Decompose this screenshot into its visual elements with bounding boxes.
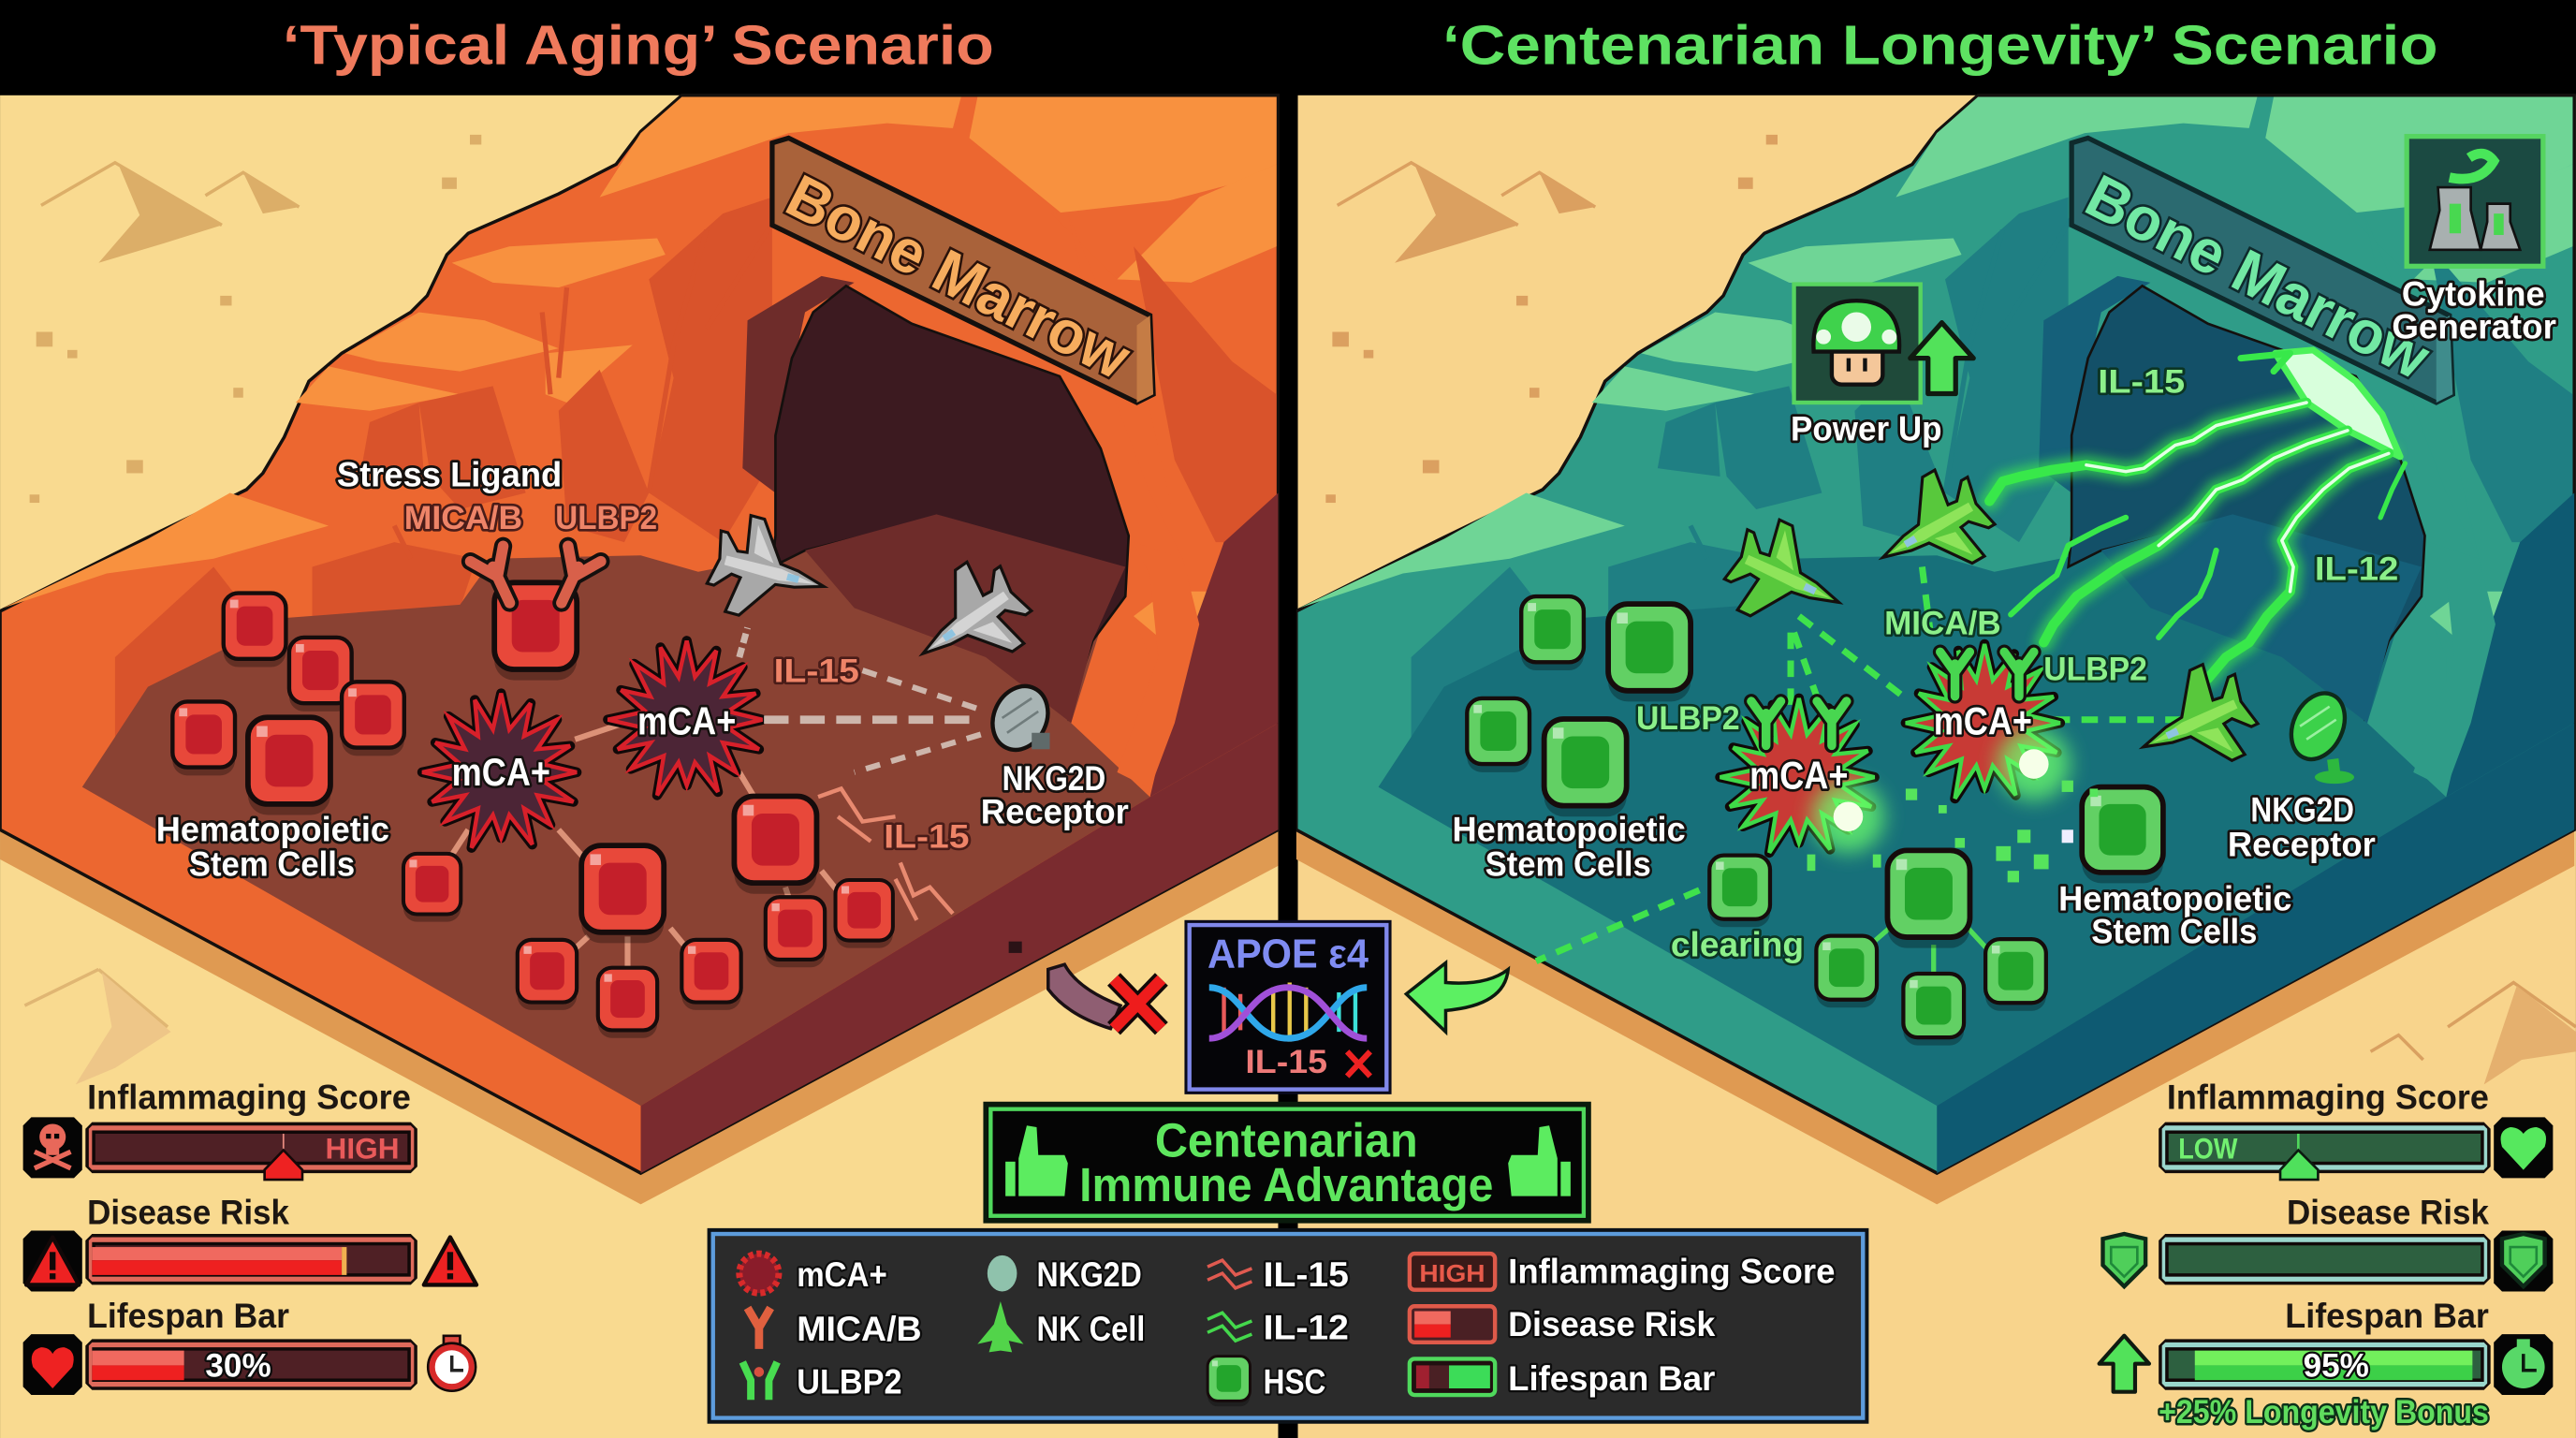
icon: up arrow: [1910, 323, 1973, 394]
NK jets left, grey: [701, 509, 1045, 695]
bone marrow terrain right: [1296, 95, 2574, 1204]
gauge: lifespan bar right: +25% Longevity Bonus: [2159, 1394, 2489, 1431]
legend item: NKG2D: NKG2D: [1036, 1255, 1142, 1294]
legend item: MICA/B: MICA/B: [797, 1310, 922, 1348]
legend item: IL-15: IL-15: [1264, 1255, 1349, 1294]
legend item: IL-15: [1208, 1255, 1349, 1294]
labels left: Stress Ligand: [337, 455, 562, 493]
gauge: lifespan bar right: 95%: [2304, 1348, 2369, 1385]
title: typical aging scenario: ‘Typical Aging’ Scenario: [283, 13, 994, 76]
icon: DNA helix: [1209, 983, 1367, 1042]
gauge: lifespan bar left: Lifespan Bar: [87, 1297, 289, 1335]
icon: stopwatch: [428, 1336, 476, 1391]
labels left: Stem Cells: [189, 844, 355, 883]
NKG2D receptor dish left: [983, 677, 1058, 759]
labels left: ULBP2: [555, 500, 657, 536]
legend panel: [710, 1231, 1866, 1421]
hematopoietic stem cells right: [1467, 596, 2163, 1046]
legend item: mCA+: mCA+: [797, 1255, 887, 1294]
icon: stopwatch green: [2502, 1339, 2545, 1388]
gauge: lifespan bar right: [2100, 1297, 2553, 1431]
labels right: Generator: [2392, 308, 2556, 346]
APOE e4 gene panel: APOE ε4: [1208, 932, 1369, 977]
icon: thumb up right: [1508, 1125, 1571, 1196]
gauge: inflammaging score left: HIGH: [326, 1131, 400, 1165]
legend item: inflammaging score: HIGH: [1419, 1259, 1486, 1287]
legend item: NK Cell: [977, 1301, 1145, 1352]
labels right: mCA+: [1749, 753, 1848, 797]
icon: heart: [32, 1347, 74, 1388]
labels right: clearing: [1671, 925, 1804, 963]
labels right: Hematopoietic: [2058, 879, 2291, 917]
legend item: NKG2D: [988, 1255, 1142, 1294]
sign: bone marrow: Bone Marrow: [776, 161, 1141, 392]
gauge: inflammaging score right: [2159, 1078, 2553, 1180]
gauge: inflammaging score right: LOW: [2178, 1131, 2238, 1165]
gauge: lifespan bar left: [23, 1297, 476, 1395]
labels left: Receptor: [981, 792, 1129, 830]
legend item: ULBP2: ULBP2: [797, 1362, 902, 1401]
labels left: Hematopoietic: [156, 811, 389, 849]
labels right: ULBP2: [1636, 700, 1740, 737]
legend item: ULBP2: [742, 1362, 902, 1401]
legend item: inflammaging score: Inflammaging Score: [1508, 1253, 1835, 1291]
gauge: disease risk left: [23, 1193, 476, 1291]
gauge: inflammaging score left: Inflammaging Score: [87, 1078, 411, 1117]
green attack beams: [1536, 566, 2185, 961]
legend item: lifespan bar: Lifespan Bar: [1508, 1359, 1715, 1398]
stress ligand receptors: [471, 546, 601, 610]
banner: centenarian immune advantage: Centenarian: [1155, 1114, 1418, 1167]
weak IL-15 dashed signals: [739, 627, 981, 772]
labels right: Stem Cells: [2091, 912, 2257, 950]
labels left: mCA+: [452, 750, 550, 794]
labels left: MICA/B: [404, 500, 522, 536]
banner: centenarian immune advantage: [986, 1104, 1588, 1221]
legend item: disease risk: [1410, 1305, 1716, 1343]
arrow green pointing to gene: [1406, 962, 1508, 1032]
hematopoietic stem cells left: [172, 582, 893, 1038]
gauge: disease risk right: Disease Risk: [2287, 1193, 2489, 1231]
gauge: disease risk left: Disease Risk: [87, 1193, 289, 1231]
labels right: [1453, 274, 2556, 963]
labels left: [156, 455, 1129, 883]
connectors between cells: [446, 723, 842, 969]
icon: heart green: [2501, 1127, 2546, 1170]
panel: centenarian longevity scenario: [1296, 95, 2576, 1438]
labels right: mCA+: [1934, 698, 2032, 742]
sand ground left: [0, 95, 1278, 1438]
connectors right: [1865, 929, 1988, 977]
legend item: IL-12: [1208, 1308, 1349, 1346]
APOE e4 gene panel: IL-15: [1245, 1044, 1327, 1080]
labels right: MICA/B: [1884, 605, 2001, 641]
rock speck: [1009, 942, 1022, 953]
gauge: inflammaging score left: [23, 1078, 417, 1180]
power up tile: [1794, 285, 1973, 403]
labels left: mCA+: [637, 698, 736, 742]
central divider: [1280, 0, 1296, 1438]
gauge: lifespan bar left: 30%: [205, 1348, 271, 1385]
bone marrow terrain left: [0, 95, 1278, 1204]
icon: mushroom: [1813, 301, 1899, 385]
labels right: IL-12: [2315, 551, 2398, 588]
labels right: IL-15: [2098, 363, 2185, 400]
labels right: Receptor: [2228, 825, 2376, 863]
banner: centenarian immune advantage: Immune Advantage: [1079, 1158, 1493, 1211]
mCA+ cells right: [1720, 644, 2060, 853]
labels right: Power Up: [1791, 409, 1942, 448]
lightning: cytokine energy: [1989, 350, 2405, 679]
legend item: HSC: [1208, 1357, 1325, 1406]
sign: bone marrow right: Bone Marrow: [2075, 161, 2440, 392]
labels left: IL-15: [774, 653, 859, 689]
labels right: Hematopoietic: [1453, 811, 1686, 849]
sand ground right: [1298, 95, 2576, 1438]
legend item: MICA/B: [748, 1308, 922, 1349]
NKG2D receptor dish right: [2281, 684, 2355, 784]
APOE e4 gene panel: [1188, 923, 1388, 1091]
cytokine generator tile: [2407, 137, 2543, 266]
dunes right: [1325, 135, 1778, 503]
NK jets right, green: [1715, 458, 2267, 792]
labels right: ULBP2: [2043, 652, 2147, 688]
legend item: disease risk: Disease Risk: [1508, 1305, 1716, 1343]
legend item: lifespan bar: [1410, 1358, 1715, 1398]
legend item: NK Cell: NK Cell: [1036, 1310, 1145, 1348]
labels left: IL-15: [884, 819, 970, 856]
ULBP2 receptors right: [1751, 652, 2034, 745]
gauge: inflammaging score right: Inflammaging Score: [2167, 1078, 2489, 1117]
legend item: mCA+: [739, 1254, 887, 1294]
mCA+ cells left: [422, 640, 762, 848]
icon: thumb up left: [1005, 1125, 1068, 1196]
labels right: Stem Cells: [1486, 844, 1651, 883]
gauge: disease risk right: [2102, 1193, 2553, 1291]
icon: skull: [35, 1123, 71, 1168]
dunes left: [24, 135, 481, 1084]
labels right: NKG2D: [2250, 791, 2354, 829]
IL-15 squiggles left: [818, 788, 953, 920]
icon: red x small: [1347, 1051, 1370, 1077]
labels left: NKG2D: [1003, 759, 1105, 798]
labels right: Cytokine: [2402, 274, 2545, 313]
gauge: lifespan bar right: Lifespan Bar: [2285, 1297, 2489, 1335]
legend item: IL-12: IL-12: [1264, 1308, 1349, 1346]
arrow blocked left with red X: [1048, 964, 1162, 1029]
panel: typical aging scenario: [0, 95, 1278, 1438]
title: centenarian longevity scenario: ‘Centenarian Longevity’ Scenario: [1442, 13, 2438, 76]
legend item: HSC: HSC: [1264, 1362, 1325, 1401]
explosions: [1808, 727, 2098, 882]
